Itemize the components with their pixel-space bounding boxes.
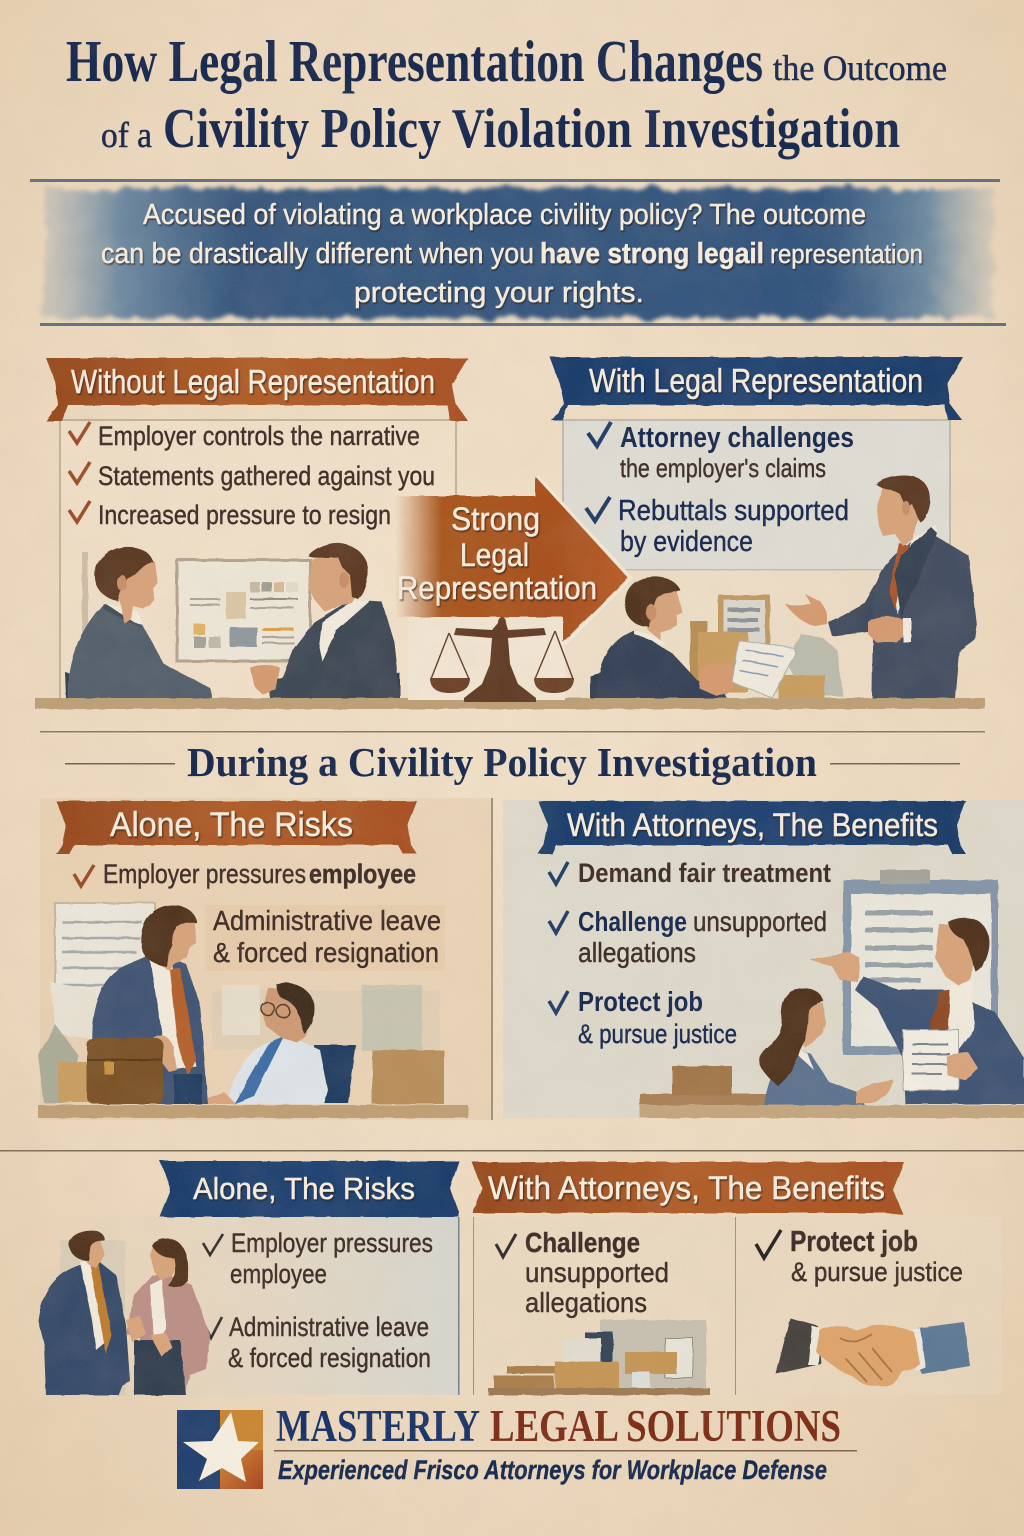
panel: without legal representation [46, 358, 468, 700]
checklist: benefits: Protect job [578, 986, 703, 1017]
checklist: benefits: allegations [578, 937, 696, 968]
shelf: top scene [35, 698, 985, 709]
checklist: risks: Administrative leave [229, 1312, 429, 1342]
intro banner [30, 179, 1006, 326]
intro banner: can be drastically different when you [101, 238, 534, 270]
checklist: without: Statements gathered against you [98, 461, 435, 491]
brand name: MASTERLY [276, 1401, 480, 1451]
panel: alone, the risks (bottom) [38, 1161, 460, 1395]
checklist: risks [203, 1228, 433, 1373]
intro banner: have strong legail [540, 238, 764, 270]
ribbon: alone the risks: Alone, The Risks [110, 806, 353, 844]
ribbon: with attorneys orange: With Attorneys, The Benefits [488, 1170, 885, 1206]
right man [372, 673, 400, 698]
ribbon: with legal representation [550, 357, 963, 420]
ribbon: with attorneys benefits: With Attorneys, The Benefits [567, 807, 938, 843]
checklist: benefits [549, 858, 831, 1049]
checklist: benefits: Demand fair treatment [578, 858, 831, 888]
ribbon: alone risks blue [160, 1161, 459, 1217]
intro banner: Accused of violating a workplace civility policy? The outcome [143, 199, 866, 231]
intro banner: representation [770, 239, 923, 269]
ribbon: with attorneys benefits [538, 801, 966, 854]
arrow label [397, 501, 597, 606]
title: How Legal Representation Changes [66, 28, 763, 94]
panel: with legal representation [550, 357, 977, 700]
intro banner: protecting your rights. [354, 277, 644, 309]
arrow label: Representation [397, 570, 597, 606]
checklist: without: Increased pressure to resign [98, 500, 391, 530]
checklist item: employer pressures: Employer pressures [103, 859, 306, 889]
divider [0, 1150, 1024, 1152]
ribbon: with attorneys orange [472, 1162, 904, 1215]
brand name: LEGAL SOLUTIONS [490, 1401, 841, 1451]
checklist: with: the employer's claims [620, 453, 826, 483]
ribbon: alone the risks [56, 801, 417, 854]
shelf [640, 1105, 1024, 1118]
brand name [276, 1401, 841, 1451]
ribbon: with legal representation: With Legal Representation [589, 362, 923, 399]
scene: employer meeting [65, 543, 400, 698]
checklist: benefits: unsupported [693, 906, 827, 937]
checklist: with [586, 422, 854, 558]
text: administrative leave: Administrative leave [213, 905, 441, 936]
arrow label: Strong [451, 501, 540, 537]
column: protect job [756, 1226, 963, 1287]
ribbon: without legal representation: Without Legal Representation [71, 363, 435, 400]
shelf [38, 1105, 468, 1118]
text: administrative leave [205, 905, 445, 971]
column: challenge: Challenge [525, 1227, 640, 1258]
tagline: Experienced Frisco Attorneys for Workplace Defense [278, 1455, 827, 1485]
scene: two colleagues talking [38, 1231, 210, 1395]
column: protect job: Protect job [790, 1226, 918, 1258]
panel: alone, the risks (middle) [38, 798, 493, 1120]
text: administrative leave: & forced resignation [213, 937, 439, 968]
checklist: risks: employee [230, 1259, 327, 1289]
scene: attorney and client [590, 476, 977, 699]
icon: handshake [776, 1318, 970, 1386]
ribbon: without legal representation [46, 358, 468, 421]
title [66, 28, 947, 160]
checklist: with: by evidence [620, 526, 753, 558]
scene: attorney with client [640, 870, 1024, 1116]
checklist: without [69, 421, 435, 530]
arrow label: Legal [460, 537, 529, 573]
arrow: strong legal representation [395, 476, 631, 702]
checklist: with: Rebuttals supported [618, 495, 849, 527]
title: the Outcome [773, 48, 947, 88]
left man [65, 672, 111, 698]
column: challenge: unsupported [525, 1257, 669, 1288]
standing attorney [828, 580, 884, 636]
icon: scales of justice [430, 617, 574, 702]
column: challenge [496, 1227, 669, 1318]
scene: employer pressuring employee [38, 903, 444, 1104]
checklist: benefits: Challenge [578, 906, 687, 937]
checklist item: employer pressures: employee [309, 859, 416, 889]
title: of a [101, 115, 152, 155]
footer logo [177, 1401, 857, 1489]
column: challenge: allegations [525, 1287, 647, 1318]
icon: star flag [177, 1410, 263, 1489]
panel: with attorneys, the benefits (bottom) [472, 1162, 1001, 1395]
checklist: without: Employer controls the narrative [98, 421, 420, 451]
checklist: risks: & forced resignation [228, 1343, 431, 1373]
ribbon: alone risks blue: Alone, The Risks [193, 1171, 415, 1206]
checklist: risks: Employer pressures [231, 1228, 433, 1258]
checklist: with: Attorney challenges [620, 422, 854, 454]
column: protect job: & pursue justice [791, 1257, 963, 1287]
panel: with attorneys, the benefits (middle) [503, 800, 1024, 1118]
checklist: benefits: & pursue justice [578, 1019, 737, 1049]
section heading: During a Civility Policy Investigation [187, 739, 817, 785]
icon: boxes and documents [488, 1320, 710, 1395]
